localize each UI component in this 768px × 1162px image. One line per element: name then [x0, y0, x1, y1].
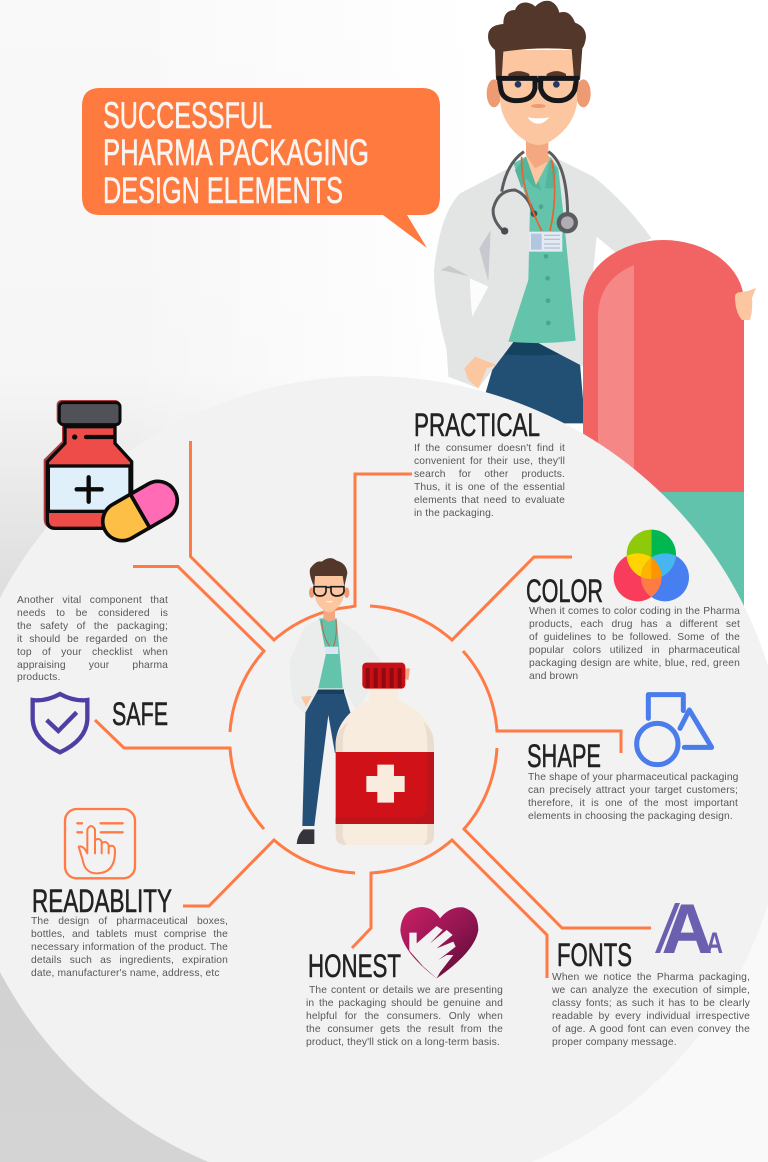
text: honest: in the packaging should be genuine and [306, 998, 503, 1009]
text: practical: If the consumer doesn't find it [414, 443, 565, 454]
text: shape: elements in choosing the packaging design. [528, 811, 733, 822]
text: fonts: proper company message. [552, 1037, 677, 1048]
text: readablity: date, manufacturer's name, address, etc [31, 968, 220, 979]
small doctor shoe [297, 829, 314, 844]
icon: heart and hand [400, 907, 478, 978]
text: color [529, 606, 740, 682]
text: practical: in the packaging. [414, 508, 494, 519]
text: safe: Another vital component that [17, 595, 168, 606]
doctor face [500, 50, 577, 145]
line: fonts lower and honest [352, 840, 547, 978]
text: color: products, each drug has a different set [529, 619, 740, 630]
icon: colour circles [614, 530, 689, 601]
small doctor hand [301, 696, 312, 707]
doctor shirt [508, 157, 576, 343]
heading: fonts: FONTS [557, 937, 632, 973]
text: fonts: we can analyze the execution of simple, [552, 985, 750, 996]
text: readablity: details such as ingredients, expiration [31, 955, 228, 966]
doctor glasses [499, 78, 577, 101]
text: safe [17, 595, 168, 683]
icon: fonts Aa: A [662, 890, 713, 968]
text: color: and brown [529, 671, 578, 682]
text: practical: convenient for their use, they'll [414, 456, 565, 467]
text: color: of guidelines to be followed. Some of the [529, 632, 740, 643]
icon: readability hand [65, 809, 135, 878]
text: honest: product, they'll stick on a long-term basis. [306, 1037, 500, 1048]
small doctor lanyard and badge [322, 620, 336, 647]
small doctor hair [310, 558, 347, 587]
text: honest: the consumer gets the result from the [306, 1024, 503, 1035]
pill highlight [598, 265, 634, 492]
icon: shapes [637, 695, 712, 765]
line: safe lower [95, 720, 264, 829]
text: practical [414, 443, 565, 519]
text: safe: products. [17, 672, 60, 683]
text: color: popular colors utilized in pharmaceutical [529, 645, 740, 656]
speech bubble title: PHARMA PACKAGING [103, 132, 369, 173]
small doctor head [309, 587, 314, 598]
speech bubble title: SUCCESSFUL [103, 95, 272, 136]
text: readablity: necessary information of the product. The [31, 942, 228, 953]
small doctor shirt [318, 618, 343, 688]
pill red top [583, 240, 744, 492]
line: practical and top-left to bottle icon [190, 441, 412, 640]
text: safe: the safety of the packaging; [17, 621, 168, 632]
text: safe: top of your checklist when [17, 647, 168, 658]
text: practical: search for other products. [414, 469, 565, 480]
heading: safe: SAFE [112, 696, 168, 732]
text: practical: Thus, it is one of the essential [414, 482, 565, 493]
small doctor glasses [314, 587, 344, 596]
doctor mouth [531, 104, 546, 108]
small doctor and bottle [290, 558, 434, 845]
bottle cross [366, 765, 405, 803]
icon: shield [33, 694, 87, 752]
text: honest: The content or details we are presenting [309, 985, 503, 996]
heading: practical: PRACTICAL [414, 407, 540, 443]
bottle cap [362, 663, 405, 689]
lanyard and badge [522, 157, 555, 231]
stethoscope [493, 152, 568, 232]
bottle label [336, 752, 434, 824]
large pill [583, 240, 756, 632]
text: readablity: bottles, and tablets must comprise the [31, 929, 228, 940]
doctor illustration [434, 1, 652, 423]
doctor hand on pill [735, 288, 756, 320]
doctor pocket hand [464, 357, 497, 388]
line: readability [183, 840, 355, 906]
text: shape: therefore, it is one of the most important [528, 798, 738, 809]
text: shape: The shape of your pharmaceutical packaging [528, 772, 739, 783]
text: safe: needs to be considered is [17, 608, 168, 619]
connector lines [95, 441, 651, 978]
icon: medicine bottle and capsule [45, 400, 184, 548]
text: honest [306, 985, 503, 1048]
text: fonts: of age. A good font can even convey the [552, 1024, 750, 1035]
text: readablity [31, 916, 228, 979]
speech bubble title: DESIGN ELEMENTS [103, 170, 343, 211]
text: color: packaging design are white, blue, red, green [529, 658, 740, 669]
text: fonts: When we notice the Pharma packaging, [552, 972, 750, 983]
text: shape: can precisely attract your target customers; [528, 785, 738, 796]
text: fonts: readable by every individual irrespective [552, 1011, 750, 1022]
text: safe: appraising your pharma [17, 660, 168, 671]
doctor coat [434, 157, 652, 388]
line: fonts upper [464, 748, 651, 928]
text: honest: helpful for the consumers. Only when [306, 1011, 503, 1022]
small doctor trousers [302, 692, 352, 826]
text: practical: elements that need to evaluate [414, 495, 565, 506]
doctor hair [488, 1, 586, 80]
speech bubble title [82, 88, 440, 248]
pill green base [583, 492, 744, 632]
text: safe: it should be regarded on the [17, 634, 168, 645]
heading: honest: HONEST [308, 948, 401, 984]
text: fonts [552, 972, 750, 1048]
small doctor coat [290, 618, 382, 713]
icon: fonts Aa: A [706, 927, 723, 960]
line: shape [463, 651, 621, 753]
text: fonts: classy fonts; as such it has to be clearly [552, 998, 750, 1009]
heading: readablity: READABLITY [32, 883, 172, 919]
text: readablity: The design of pharmaceutical boxes, [31, 916, 228, 927]
heading: shape: SHAPE [527, 738, 601, 774]
line: color [370, 557, 572, 640]
small doctor smile [325, 601, 333, 602]
doctor trousers [477, 343, 585, 423]
bottle body [336, 688, 434, 845]
text: shape [528, 772, 739, 822]
central circle panel [0, 376, 768, 1162]
line: safe upper left [133, 566, 264, 732]
text: color: When it comes to color coding in the Pharma [529, 606, 740, 617]
heading: color: COLOR [526, 573, 603, 609]
doctor eyebrows [508, 71, 529, 77]
doctor ears [487, 79, 501, 107]
doctor neck [526, 157, 551, 185]
